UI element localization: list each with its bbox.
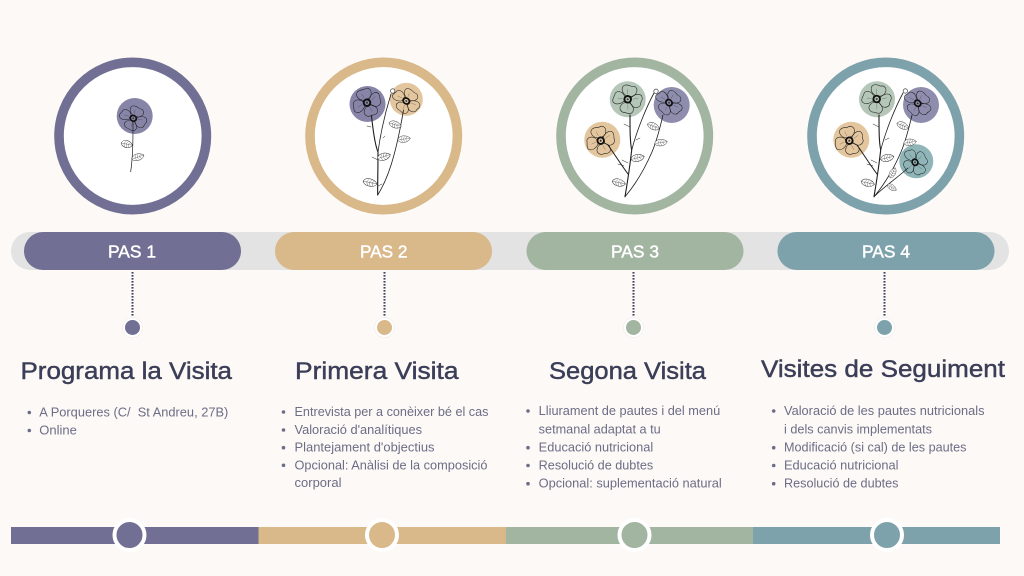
- step pill 1: [24, 232, 241, 270]
- heading 1: Programa la Visita: [20, 358, 232, 385]
- bullet list 3: Resolució de dubtes: [539, 458, 653, 472]
- bullet list 2: corporal: [294, 476, 342, 490]
- bullet list 1: Online: [39, 424, 77, 438]
- icon: flower circle 2: [310, 62, 457, 210]
- bullet list 4: [772, 404, 984, 491]
- heading 4: Visites de Seguiment: [761, 356, 1005, 383]
- bullet list 4: i dels canvis implementats: [784, 422, 932, 436]
- dotted connector 3: [632, 272, 634, 317]
- bullet list 2: Valoració d'analítiques: [294, 423, 422, 437]
- bullet list 4: Modificació (si cal) de les pautes: [784, 441, 966, 455]
- panel: pas 1: [20, 62, 241, 438]
- timeline track: [11, 232, 1009, 270]
- dotted connector 4: [884, 272, 886, 317]
- step pill 2: PAS 2: [360, 242, 408, 262]
- bullet list 2: Plantejament d'objectius: [294, 441, 434, 455]
- panel: pas 3: [526, 62, 744, 491]
- step pill 2: [275, 232, 492, 270]
- bullet list 4: Valoració de les pautes nutricionals: [784, 404, 984, 418]
- node dot 4: [874, 318, 894, 338]
- node dot 2: [374, 318, 394, 338]
- step pill 3: [526, 232, 744, 270]
- step pill 4: [778, 232, 994, 270]
- bullet list 1: [28, 406, 228, 438]
- panel: pas 2: [275, 62, 492, 490]
- step pill 4: PAS 4: [862, 242, 910, 262]
- bullet list 4: Resolució de dubtes: [784, 477, 898, 491]
- dotted connector 1: [132, 272, 134, 317]
- bullet list 3: [526, 404, 722, 491]
- bullet list 3: Opcional: suplementació natural: [539, 477, 722, 491]
- panel: pas 4: [761, 62, 1005, 491]
- bullet list 1: A Porqueres (C/ St Andreu, 27B): [39, 406, 228, 420]
- bullet list 3: Lliurament de pautes i del menú: [539, 404, 720, 418]
- bullet list 3: setmanal adaptat a tu: [539, 422, 661, 436]
- bullet list 2: [282, 405, 488, 490]
- bottom progress bar: [11, 520, 1000, 550]
- dotted connector 2: [384, 272, 386, 317]
- icon: flower circle 4: [812, 62, 959, 210]
- step pill 1: PAS 1: [108, 242, 156, 262]
- node dot 3: [624, 318, 644, 338]
- heading 2: Primera Visita: [295, 358, 459, 385]
- bullet list 4: Educació nutricional: [784, 458, 898, 472]
- bullet list 2: Entrevista per a conèixer bé el cas: [294, 405, 488, 419]
- step pill 3: PAS 3: [611, 242, 659, 262]
- heading 3: Segona Visita: [549, 358, 706, 385]
- icon: flower circle 3: [561, 62, 708, 210]
- bullet list 3: Educació nutricional: [539, 441, 653, 455]
- icon: flower circle 1: [59, 62, 206, 210]
- bullet list 2: Opcional: Anàlisi de la composició: [294, 458, 488, 472]
- node dot 1: [122, 318, 142, 338]
